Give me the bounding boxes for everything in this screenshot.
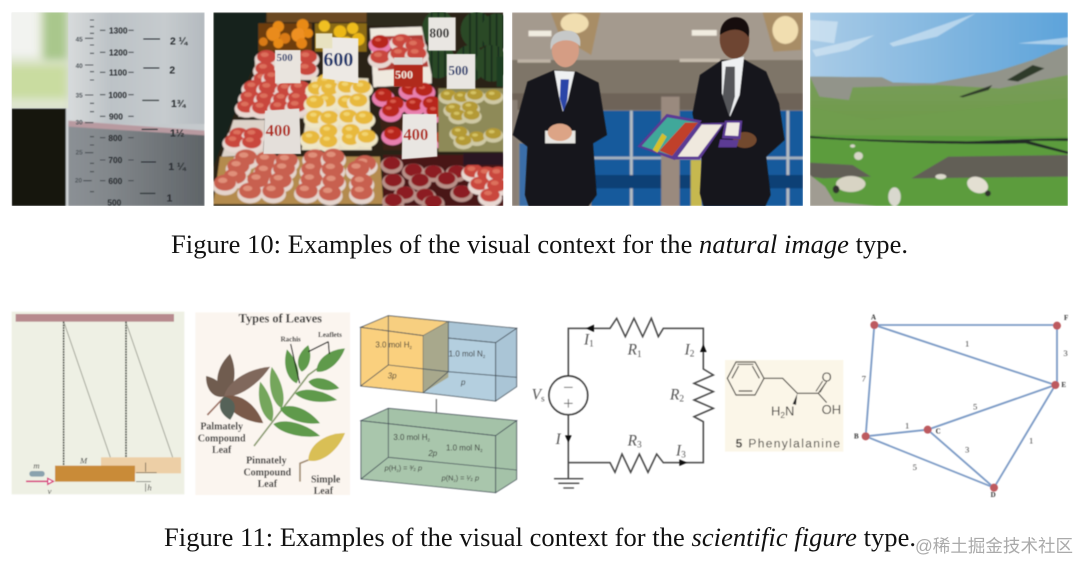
graph labels [854, 313, 1068, 499]
leaf labels: Simple [311, 475, 341, 486]
person: right man [692, 17, 785, 206]
beaker millilitre scale: 1200 [109, 48, 128, 58]
circuit labels: s [541, 395, 545, 405]
price signs: 500 [277, 53, 293, 64]
beaker millilitre scale: 25 [76, 150, 83, 157]
figure: phenylalanine molecule: H [771, 403, 780, 418]
price signs: 800 [429, 25, 450, 40]
beaker millilitre scale: 800 [108, 133, 123, 143]
price signs: 500 [395, 67, 413, 81]
wrapped dark red fruit [380, 154, 504, 206]
figure: gas mixing boxes: 1.0 mol N [449, 350, 483, 359]
panel: scientific figures [12, 312, 1068, 499]
voltage source [549, 376, 588, 415]
circuit labels: I [676, 442, 681, 459]
beaker cup scale: 1 [167, 193, 173, 204]
circuit labels: V [532, 386, 541, 403]
graph labels: C [936, 427, 941, 435]
figure: weighted graph: 7 [862, 373, 867, 383]
red fruit left rows [235, 50, 319, 119]
circuit labels: I [584, 331, 589, 348]
price signs: 400 [266, 121, 291, 140]
figure: ballistic pendulum: v [48, 486, 52, 496]
leaf labels: Leaf [314, 486, 334, 497]
leaf labels [198, 331, 342, 497]
chandeliers [551, 12, 803, 55]
blue windows [512, 97, 803, 206]
circuit labels: I [555, 431, 562, 448]
figure: gas mixing boxes: 3p [388, 372, 397, 381]
beaker cup scale: 1 ¼ [168, 162, 187, 173]
price signs: 500 [448, 63, 469, 78]
beaker millilitre scale: 20 [75, 178, 83, 185]
palmate leaf [201, 352, 274, 429]
top orange crate [258, 19, 313, 52]
figure: gas mixing boxes: 2 [480, 448, 483, 453]
figure: gas mixing boxes: p [417, 464, 422, 473]
photo: measuring beaker [12, 12, 205, 206]
figure: phenylalanine molecule: N [785, 403, 794, 418]
figure: gas mixing boxes: ) = ¹⁄₂ [456, 474, 475, 483]
sheep [833, 144, 991, 206]
figure: gas mixing boxes: 3.0 mol H [393, 433, 428, 442]
circuit labels: 1 [589, 340, 594, 350]
small red tray [222, 120, 265, 157]
price signs: 600 [323, 49, 353, 71]
beaker millilitre scale: 1300 [109, 25, 128, 35]
caption: figure 11: Figure 11: Examples of the visual context for the scientific figure type. [164, 522, 916, 552]
figure: phenylalanine molecule [725, 360, 843, 452]
figure: weighted graph: 1 [1029, 435, 1033, 445]
leaf labels: Leaf [212, 445, 232, 456]
beaker millilitre scale: 40 [76, 63, 83, 70]
figure: gas mixing boxes: p [474, 474, 479, 483]
leaf labels: Pinnately [246, 455, 287, 466]
dry stone walls [810, 136, 1068, 206]
graph labels: B [854, 432, 859, 440]
figure: weighted graph: 3 [965, 445, 969, 455]
figure: gas mixing boxes: 2 [428, 437, 431, 442]
beaker cup scale: 1¾ [171, 99, 187, 110]
figure: weighted graph: 5 [913, 462, 917, 472]
beaker millilitre scale: 900 [109, 112, 123, 122]
figure: gas mixing boxes: 2 [453, 478, 456, 483]
leaf labels: Leaf [258, 479, 278, 490]
circuit labels [532, 331, 695, 461]
beaker millilitre scale: 700 [108, 155, 123, 165]
simple leaf [300, 426, 350, 482]
beaker millilitre scale: 600 [108, 176, 123, 186]
upper box [361, 316, 517, 401]
leaf labels: Leaflets [318, 331, 342, 339]
watermelons [422, 12, 504, 87]
yellow fruit rows [299, 74, 378, 152]
graph labels: F [1064, 314, 1068, 322]
top yellow crate [315, 20, 367, 52]
beaker millilitre scale: 500 [107, 197, 122, 207]
current arrows [565, 325, 707, 466]
graph labels: E [1061, 381, 1066, 389]
circuit labels: 2 [679, 395, 684, 405]
figure: ballistic pendulum: M [79, 456, 88, 466]
figure: phenylalanine molecule: OH [822, 402, 841, 417]
beaker millilitre scale: 1000 [108, 90, 127, 100]
beaker cup scale [167, 36, 189, 204]
bullet [29, 471, 45, 477]
circuit labels: 1 [637, 350, 642, 360]
graph edges [866, 325, 1057, 488]
beaker millilitre scale [75, 25, 128, 207]
pink wrapped red fruit [370, 82, 440, 150]
figure: gas mixing boxes: 2 [410, 345, 413, 350]
figure: gas mixing boxes: 3.0 mol H [375, 341, 410, 350]
photo: green valley with sheep [810, 12, 1068, 206]
figure: gas mixing boxes [361, 316, 517, 493]
leaf labels: Compound [243, 467, 292, 478]
leaf labels: Compound [198, 434, 246, 445]
beaker millilitre scale: 35 [76, 92, 83, 99]
figure: gas mixing boxes: p(H [385, 464, 396, 473]
molecule caption: 5 Phenylalanine [736, 437, 840, 451]
figure: gas mixing boxes: p(N [442, 474, 453, 483]
circuit labels: 2 [690, 350, 695, 360]
graph nodes [862, 321, 1061, 492]
figure: gas mixing boxes: p [460, 378, 466, 387]
figure: phenylalanine molecule: 2 [780, 410, 785, 420]
figure: gas mixing boxes: 1.0 mol N [446, 444, 480, 453]
beaker cup scale: 2 ¼ [170, 36, 189, 47]
figure: ballistic pendulum: h [147, 483, 152, 493]
beaker millilitre scale: 1100 [109, 68, 127, 78]
graph labels: A [871, 313, 876, 321]
beaker cup scale: 2 [169, 65, 175, 76]
figure: weighted graph: 1 [965, 339, 969, 349]
figure: ballistic pendulum: m [33, 460, 40, 470]
beaker millilitre scale: 45 [76, 37, 83, 44]
figure: weighted graph: 3 [1063, 348, 1068, 358]
figure: electric circuit [532, 318, 713, 488]
ground symbol [554, 479, 583, 488]
beaker cup scale: 1½ [170, 129, 185, 140]
figure: gas mixing boxes: 2 [396, 468, 399, 473]
figure: weighted graph: 1 [905, 421, 909, 431]
leaf labels: Palmately [200, 422, 243, 433]
caption: figure 10: Figure 10: Examples of the visual context for the natural image type. [171, 229, 908, 259]
panel: natural image photos [0, 0, 1068, 212]
leaves title: Types of Leaves [239, 312, 322, 326]
circuit wires and resistors [568, 318, 713, 479]
price signs [263, 17, 475, 159]
circuit labels: 3 [681, 451, 686, 461]
lower box [361, 408, 517, 493]
diploma folder [637, 114, 742, 160]
photo: fruit market [212, 10, 513, 212]
figure: weighted graph: 5 [973, 401, 977, 411]
peach trays [212, 149, 383, 205]
beaker millilitre scale: 30 [76, 120, 83, 127]
figure: phenylalanine molecule: O [822, 370, 832, 385]
figure: gas mixing boxes: ) = ³⁄₂ [399, 464, 418, 473]
mixing arrow [435, 399, 438, 421]
circuit labels: 3 [637, 441, 642, 451]
watermark: @稀土掘金技术社区 [915, 536, 1073, 556]
circuit labels: R [670, 386, 679, 403]
white fruit box [368, 27, 432, 87]
graph labels: D [991, 491, 996, 499]
circuit labels: I [685, 341, 690, 358]
figure: ballistic pendulum [12, 312, 184, 496]
figure: weighted graph [854, 313, 1068, 499]
person: left man [513, 31, 607, 206]
circuit labels: R [628, 432, 637, 449]
green apples [438, 88, 503, 152]
leaf labels: Rachis [281, 336, 301, 344]
velocity arrow [26, 479, 48, 484]
price signs: 400 [403, 125, 428, 144]
leaf arrows [291, 342, 329, 383]
figure: gas mixing boxes: 2p [427, 449, 438, 458]
circuit labels: R [628, 342, 637, 359]
figure: gas mixing boxes: 2 [483, 354, 486, 359]
photo: award ceremony [512, 12, 803, 206]
figure: types of leaves [195, 312, 350, 497]
pinnate leaf [254, 343, 349, 446]
